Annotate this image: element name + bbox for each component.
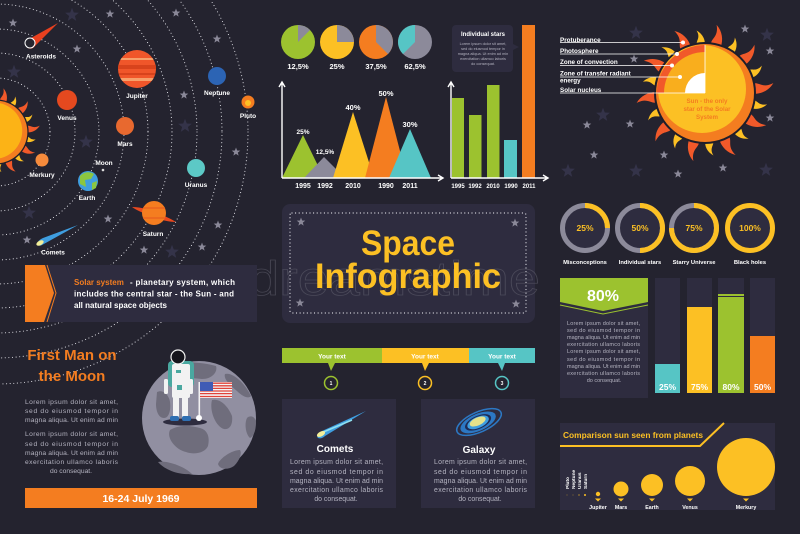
panel: 80% text: do consequat. xyxy=(587,378,622,384)
panel: 80% text: magna aliqua. Ut enim ad min xyxy=(567,364,640,370)
text: sun caption xyxy=(683,98,731,121)
icon: sun cross-section xyxy=(636,25,774,161)
pie 25%: 25% xyxy=(329,62,345,71)
panel: 80% text xyxy=(560,278,648,398)
heading: Space Infographic xyxy=(315,224,501,296)
panel: solar system definition xyxy=(25,265,257,322)
planet: Earth xyxy=(78,171,98,202)
heading: Space Infographic: Space xyxy=(361,224,455,263)
planet: Uranus: Uranus xyxy=(185,182,208,189)
pie 37,5% xyxy=(359,25,393,71)
bar chart: 2011 xyxy=(522,184,536,190)
triangle chart: 25% xyxy=(296,129,310,136)
panel: comets: sed do eiusmod tempor in xyxy=(290,469,383,476)
panel: title xyxy=(248,204,540,323)
panel: comparison of sun sizes: Merkury xyxy=(736,505,756,511)
callout: individual stars xyxy=(452,25,519,72)
triangle chart: 2010 xyxy=(345,183,361,190)
triangle chart: 12,5% xyxy=(316,149,334,156)
planet: Pluto: Pluto xyxy=(240,113,256,120)
donut 75% xyxy=(672,206,716,266)
date bar: 16-24 July 1969 xyxy=(102,493,180,505)
donut 25% xyxy=(562,206,608,266)
pie 12,5% xyxy=(281,25,315,71)
text: moon paragraphs xyxy=(25,399,119,475)
date bar xyxy=(25,488,257,508)
planet: Mars xyxy=(116,117,134,148)
pie 12,5%: 12,5% xyxy=(287,62,309,71)
planet: Jupiter xyxy=(118,50,156,100)
planet: Moon xyxy=(95,160,113,171)
panel: galaxy: exercitation ullamco laboris xyxy=(434,487,528,494)
progress bars: 25% xyxy=(659,382,676,392)
pie 25% xyxy=(320,25,354,71)
text: moon paragraphs: do consequat. xyxy=(50,468,92,475)
planet: Neptune: Neptune xyxy=(204,90,230,97)
planet: Venus: Venus xyxy=(57,115,77,122)
timeline steps: Your text xyxy=(318,354,347,360)
planet: Pluto xyxy=(240,96,256,120)
donut 100%: 100% xyxy=(739,223,761,233)
timeline steps: 2 xyxy=(424,381,427,387)
panel: galaxy: sed do eiusmod tempor in xyxy=(434,469,527,476)
bar chart: 1990 xyxy=(504,184,518,190)
callout: individual stars: sed do eiusmod tempor in xyxy=(461,47,505,51)
panel: 80% text: Lorem ipsum dolor sit amet, xyxy=(567,321,640,327)
progress bars xyxy=(655,278,775,393)
text: moon paragraphs: sed do eiusmod tempor in xyxy=(25,441,118,448)
triangle chart: 1990 xyxy=(378,183,394,190)
planet: Merkury: Merkury xyxy=(29,172,55,179)
panel: comparison of sun sizes: Venus xyxy=(682,505,698,511)
donut 100%: Black holes xyxy=(734,260,766,266)
planet: Saturn xyxy=(132,201,176,238)
labels: sun layers: Solar nucleus xyxy=(560,87,602,94)
labels: sun layers: Zone of convection xyxy=(560,59,618,66)
flag xyxy=(196,382,232,421)
labels: sun layers xyxy=(560,37,705,94)
panel: 80% text: exercitation ullamco laboris xyxy=(567,342,640,348)
timeline steps: 1 xyxy=(330,381,333,387)
heading: First Man on the Moon: First Man on xyxy=(27,347,117,364)
icon: comet xyxy=(316,411,366,438)
planet: Merkury xyxy=(29,154,55,179)
icon: galaxy xyxy=(453,403,505,441)
text: moon paragraphs: sed do eiusmod tempor in xyxy=(25,408,118,415)
callout: individual stars: magna aliqua. Ut enim ad min xyxy=(458,52,508,56)
panel: galaxy xyxy=(421,399,535,508)
planet: Uranus xyxy=(185,159,208,189)
triangle chart: 1992 xyxy=(317,183,333,190)
icon: comet small: Comets xyxy=(41,250,65,256)
panel: galaxy: do consequat. xyxy=(458,496,502,503)
triangle chart: 40% xyxy=(345,103,361,112)
triangle chart: 30% xyxy=(402,120,418,129)
progress bars: 80% xyxy=(722,382,740,392)
pie 62,5%: 62,5% xyxy=(404,62,426,71)
astronaut xyxy=(164,350,194,421)
bar chart: 1992 xyxy=(468,184,482,190)
panel: comparison of sun sizes: Saturn xyxy=(583,474,589,489)
panel: 80% text: Lorem ipsum dolor sit amet, xyxy=(567,349,640,355)
panel: galaxy: Lorem ipsum dolor sit amet, xyxy=(434,459,527,466)
donut 25%: 25% xyxy=(576,223,594,233)
panel: 80% text: sed do eiusmod tempor in xyxy=(567,328,640,334)
heading: First Man on the Moon: the Moon xyxy=(39,368,105,385)
labels: sun layers: energy xyxy=(560,78,581,84)
panel: comparison of sun sizes: Pluto xyxy=(565,477,571,489)
timeline steps: 3 xyxy=(501,381,504,387)
bar chart: 1995 xyxy=(451,184,465,190)
heading: First Man on the Moon xyxy=(27,347,117,385)
donut 75%: 75% xyxy=(685,223,703,233)
panel: galaxy: Galaxy xyxy=(463,445,496,456)
icon: comet small xyxy=(35,225,78,256)
donut 50%: Individual stars xyxy=(619,260,661,266)
panel: solar system definition: includes the central star - the Sun - and xyxy=(74,290,234,298)
panel: comets: do consequat. xyxy=(314,496,358,503)
donut charts xyxy=(562,206,772,266)
triangle chart: 2011 xyxy=(402,183,418,190)
planet: Saturn: Saturn xyxy=(143,231,163,238)
icon: sun left xyxy=(0,88,40,176)
timeline steps xyxy=(282,348,535,390)
panel: comets: magna aliqua. Ut enim ad min xyxy=(290,478,383,485)
text: moon paragraphs: magna aliqua. Ut enim ad min xyxy=(25,450,118,457)
icon: moon with astronaut and flag xyxy=(142,350,256,475)
bar chart xyxy=(448,25,548,190)
panel: solar system diagram xyxy=(0,0,256,384)
text: moon paragraphs: Lorem ipsum dolor sit amet, xyxy=(25,399,118,406)
panel: comets xyxy=(282,399,396,508)
donut 25%: Misconceptions xyxy=(563,260,607,266)
timeline steps: Your text xyxy=(411,354,440,360)
labels: sun layers: Photosphere xyxy=(560,48,599,55)
panel: 80% text: magna aliqua. Ut enim ad min xyxy=(567,335,640,341)
panel: comparison of sun sizes: Mars xyxy=(615,505,627,511)
planet: Mars: Mars xyxy=(117,141,133,148)
donut 50% xyxy=(618,206,662,266)
callout: individual stars: exercitation ullamco laboris xyxy=(460,57,506,61)
panel: comets: Lorem ipsum dolor sit amet, xyxy=(290,459,383,466)
planet: Jupiter: Jupiter xyxy=(126,93,148,100)
labels: sun layers: Zone of transfer radiant xyxy=(560,70,632,78)
progress bars: 50% xyxy=(754,382,771,392)
planet: Venus xyxy=(57,90,77,122)
panel: comets: exercitation ullamco laboris xyxy=(290,487,384,494)
planet: Earth: Earth xyxy=(79,195,95,202)
timeline steps: Your text xyxy=(488,354,517,360)
bar chart: 2010 xyxy=(486,184,500,190)
panel: 80% text: sed do eiusmod tempor in xyxy=(567,357,640,363)
text: sun caption: System xyxy=(696,114,719,121)
callout: individual stars: Lorem ipsum dolor sit amet, xyxy=(460,42,506,46)
planet: Neptune xyxy=(204,67,230,97)
icon: asteroid: Asteroids xyxy=(26,54,56,60)
donut 100% xyxy=(728,206,772,266)
panel: comparison of sun sizes: Uranus xyxy=(577,472,583,489)
labels: sun layers: Protuberance xyxy=(560,37,601,44)
panel: galaxy: magna aliqua. Ut enim ad min xyxy=(434,478,527,485)
pie 62,5% xyxy=(398,25,432,71)
callout: individual stars: do consequat. xyxy=(471,62,495,66)
text: moon paragraphs: magna aliqua. Ut enim ad min xyxy=(25,417,118,424)
panel: sun structure xyxy=(560,24,774,178)
panel: comparison of sun sizes: Earth xyxy=(645,505,659,511)
panel: solar system definition: - planetary system, which xyxy=(130,278,235,287)
panel: solar system definition: Solar system xyxy=(74,278,124,287)
panel: solar system definition: all natural space objects xyxy=(74,301,167,310)
panel: comparison of sun sizes: Neptune xyxy=(571,469,577,489)
donut 50%: 50% xyxy=(631,223,649,233)
panel: comets: Comets xyxy=(317,444,354,455)
planet: Moon: Moon xyxy=(95,160,113,167)
text: moon paragraphs: Lorem ipsum dolor sit amet, xyxy=(25,431,118,438)
callout: individual stars: Individual stars xyxy=(461,32,506,38)
panel: 80% text: exercitation ullamco laboris xyxy=(567,371,640,377)
pie charts xyxy=(281,25,432,71)
panel: comparison of sun sizes: Jupiter xyxy=(589,505,607,511)
pie 37,5%: 37,5% xyxy=(365,62,387,71)
panel: 80% text: 80% xyxy=(587,288,619,305)
icon: asteroid xyxy=(25,23,58,60)
triangle chart: 1995 xyxy=(295,183,311,190)
panel: comparison of sun sizes: Comparison sun seen from planets xyxy=(563,430,703,440)
panel: comparison of sun sizes xyxy=(560,423,775,511)
heading: Space Infographic: Infographic xyxy=(315,257,501,296)
text: sun caption: star of the Solar xyxy=(683,106,731,113)
donut 75%: Starry Universe xyxy=(673,260,716,266)
panel: title: dreamstime xyxy=(248,253,540,306)
progress bars: 75% xyxy=(691,382,708,392)
triangle chart: 50% xyxy=(378,89,394,98)
text: moon paragraphs: exercitation ullamco laboris xyxy=(25,459,119,466)
text: sun caption: Sun - the only xyxy=(687,98,728,105)
triangle chart xyxy=(279,82,443,190)
